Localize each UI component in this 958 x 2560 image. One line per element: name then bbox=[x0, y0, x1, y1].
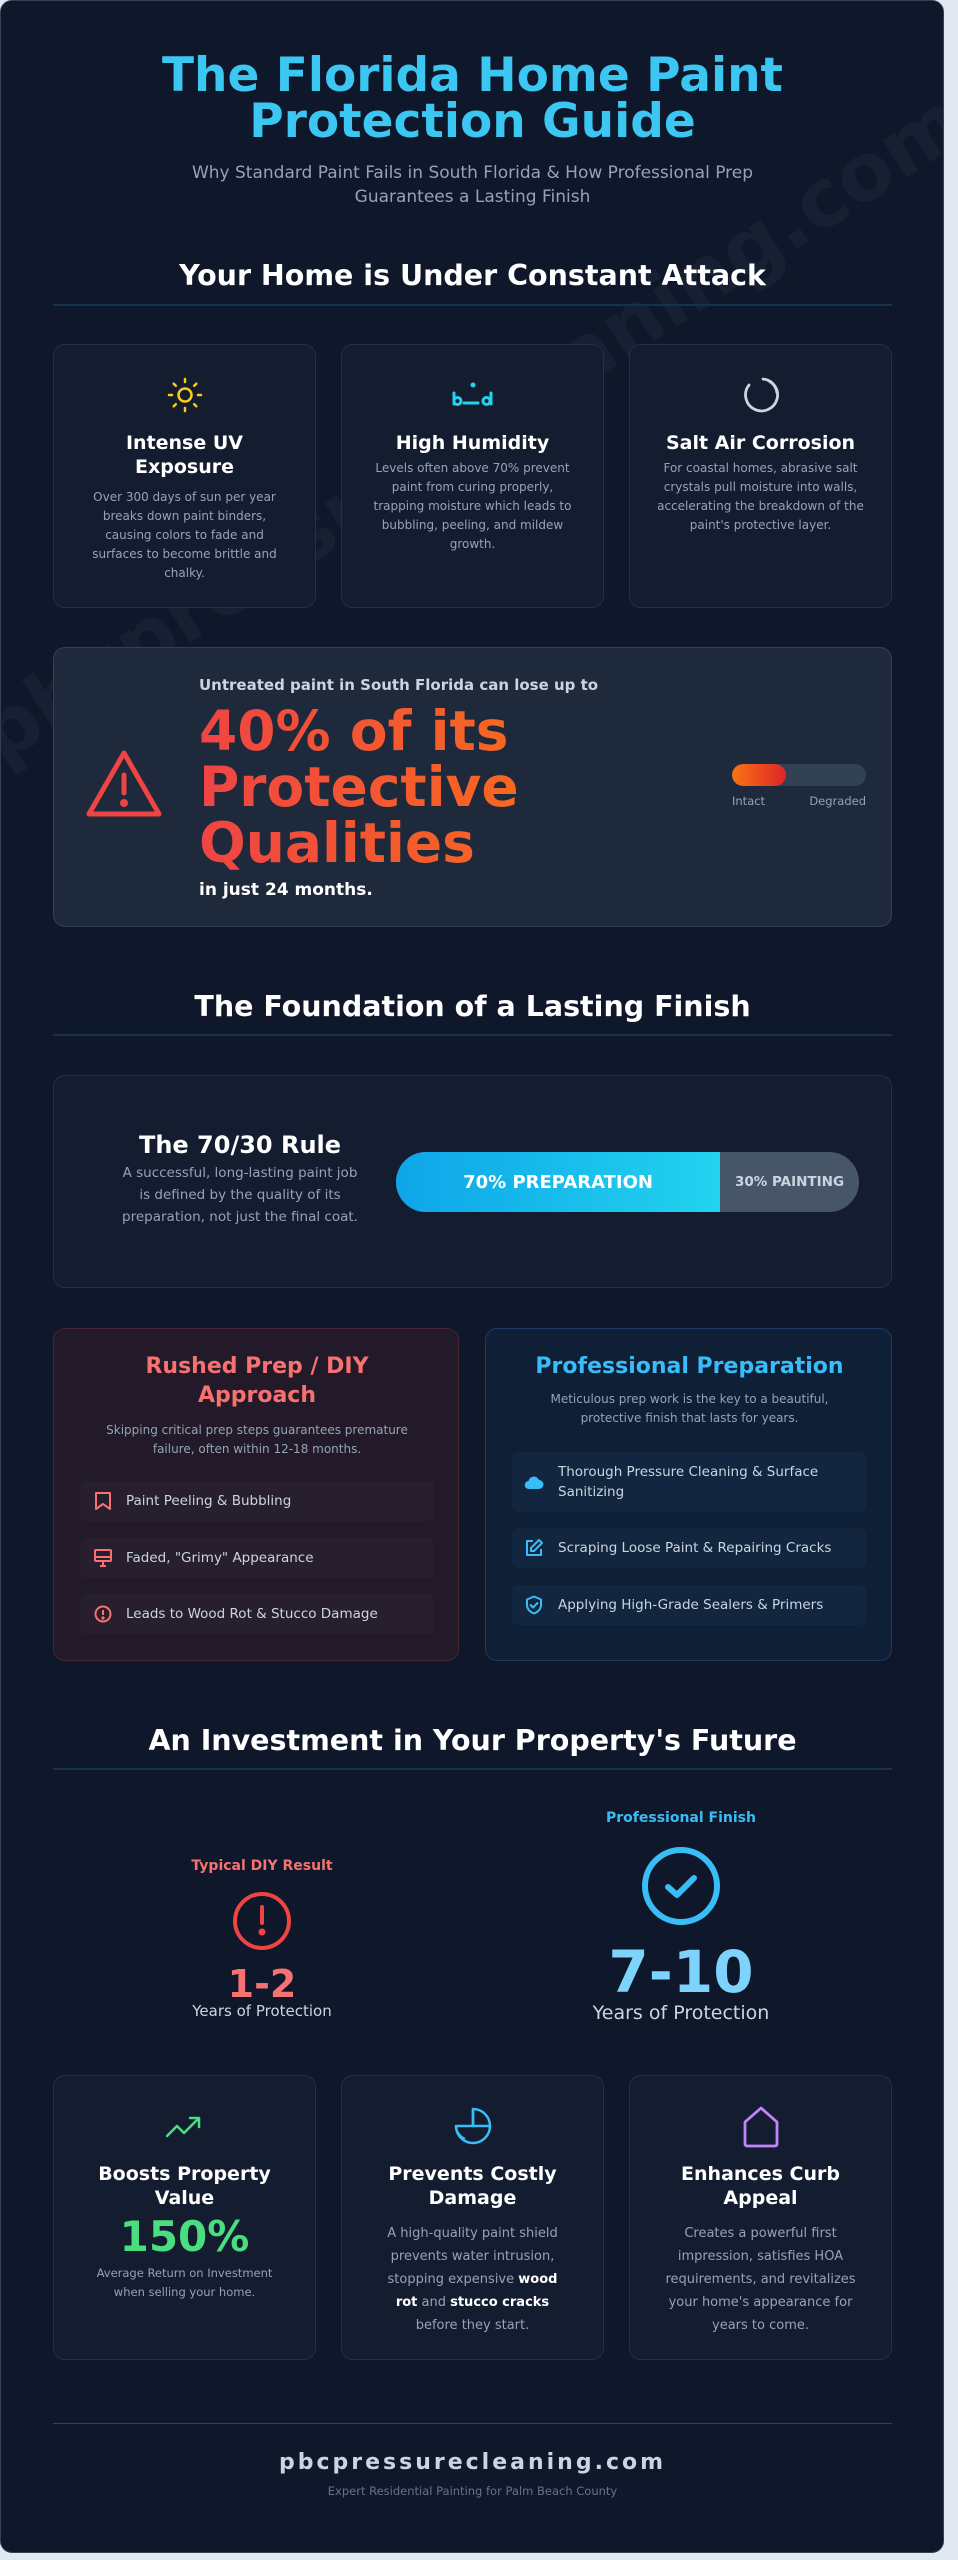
card: costly damage: Damage bbox=[429, 2187, 516, 2209]
icon: salt cycle bbox=[744, 378, 779, 412]
stat: professional finish: Professional Finish bbox=[606, 1810, 756, 1826]
item: sealers: Applying High-Grade Sealers & Primers bbox=[558, 1597, 823, 1613]
rule desc: A successful, long-lasting paint job is defined by the quality of its preparation, not just the final coat. bbox=[122, 1165, 358, 1225]
card: costly damage: A high-quality paint shield prevents water intrusion, stopping expensive wood rot and stucco cracks before they start. bbox=[387, 2226, 558, 2333]
title: Salt Air Corrosion bbox=[666, 432, 855, 454]
card: curb appeal: Creates a powerful first impression, satisfies HOA requirements, and revitalizes your home's appearance for years to come. bbox=[665, 2226, 856, 2333]
item: peeling bbox=[80, 1481, 434, 1521]
item: cleaning: Thorough Pressure Cleaning & Surface Sanitizing bbox=[558, 1464, 818, 1500]
degradation bar bbox=[732, 764, 866, 808]
card: humidity bbox=[341, 344, 604, 608]
card: salt bbox=[629, 344, 892, 608]
card: property value: Value bbox=[155, 2187, 214, 2209]
card: UV bbox=[53, 344, 316, 608]
split bar bbox=[396, 1152, 859, 1212]
card: property value bbox=[53, 2075, 316, 2360]
big stat: 40% of its Protective Qualities bbox=[199, 699, 519, 875]
split bar: 70% PREPARATION bbox=[463, 1172, 653, 1192]
card: property value: Boosts Property bbox=[98, 2163, 271, 2185]
item: peeling: Paint Peeling & Bubbling bbox=[126, 1493, 291, 1509]
icon: humidity bbox=[452, 382, 492, 406]
panel: 70/30 rule bbox=[53, 1075, 892, 1288]
item: cleaning bbox=[512, 1452, 866, 1512]
stat: DIY result: Years of Protection bbox=[192, 2002, 332, 2020]
split bar: 30% PAINTING bbox=[735, 1174, 844, 1190]
panel: professional prep bbox=[485, 1328, 892, 1661]
desc: Over 300 days of sun per year breaks down paint binders, causing colors to fade and surfaces to become brittle and chalky. bbox=[92, 490, 277, 580]
icon: pie bbox=[454, 2108, 492, 2144]
footer bbox=[279, 2450, 666, 2498]
card: curb appeal bbox=[629, 2075, 892, 2360]
icon: sun bbox=[168, 378, 202, 412]
item: sealers bbox=[512, 1585, 866, 1625]
desc: Levels often above 70% prevent paint from curing properly, trapping moisture which leads to bubbling, peeling, and mildew growth. bbox=[374, 461, 571, 551]
stat: professional finish bbox=[592, 1810, 769, 2024]
item: faded: Faded, "Grimy" Appearance bbox=[126, 1550, 314, 1566]
degradation bar: Degraded bbox=[809, 794, 866, 808]
degradation bar: Intact bbox=[732, 794, 765, 808]
title: Approach bbox=[198, 1383, 316, 1408]
title: Professional Preparation bbox=[535, 1354, 844, 1379]
title: Exposure bbox=[135, 456, 234, 478]
icon: alert circle bbox=[233, 1892, 291, 1950]
icon: check circle bbox=[642, 1847, 720, 1925]
title: High Humidity bbox=[396, 432, 549, 454]
icon: trend up bbox=[166, 2116, 200, 2138]
card: curb appeal: Appeal bbox=[723, 2187, 798, 2209]
heading: under attack: Your Home is Under Constant Attack bbox=[179, 259, 766, 292]
stat: DIY result: 1-2 bbox=[228, 1962, 296, 2006]
item: rot bbox=[80, 1594, 434, 1634]
icon: house bbox=[744, 2106, 778, 2148]
lead text: Untreated paint in South Florida can lose up to bbox=[199, 676, 598, 694]
title: Intense UV bbox=[126, 432, 243, 454]
title bbox=[162, 48, 783, 149]
item: scraping: Scraping Loose Paint & Repairing Cracks bbox=[558, 1540, 831, 1556]
title bbox=[145, 1354, 369, 1408]
stat 150%: 150% bbox=[120, 2212, 249, 2261]
stat: DIY result: Typical DIY Result bbox=[191, 1858, 333, 1874]
item: faded bbox=[80, 1538, 434, 1578]
item: rot: Leads to Wood Rot & Stucco Damage bbox=[126, 1606, 378, 1622]
panel: 40% stat bbox=[53, 647, 892, 927]
subtitle: Why Standard Paint Fails in South Florida & How Professional Prep Guarantees a Lasting Finish bbox=[192, 163, 753, 207]
desc: For coastal homes, abrasive salt crystals pull moisture into walls, accelerating the breakdown of the paint's protective layer. bbox=[657, 461, 864, 532]
title bbox=[126, 432, 243, 478]
heading: foundation: The Foundation of a Lasting Finish bbox=[194, 990, 751, 1023]
card: costly damage bbox=[341, 2075, 604, 2360]
panel: rushed prep bbox=[53, 1328, 459, 1661]
footer: pbcpressurecleaning.com bbox=[279, 2450, 666, 2475]
title: Protection Guide bbox=[249, 94, 696, 149]
icon: warning bbox=[86, 750, 162, 816]
title: Rushed Prep / DIY bbox=[145, 1354, 369, 1379]
card: property value: Average Return on Investment when selling your home. bbox=[97, 2266, 272, 2299]
card: curb appeal: Enhances Curb bbox=[681, 2163, 840, 2185]
desc: Skipping critical prep steps guarantees premature failure, often within 12-18 months. bbox=[106, 1423, 408, 1456]
stat: professional finish: Years of Protection bbox=[593, 2002, 769, 2024]
rule title: The 70/30 Rule bbox=[139, 1131, 341, 1159]
tail text: in just 24 months. bbox=[199, 880, 373, 900]
desc: Meticulous prep work is the key to a beautiful, protective finish that lasts for years. bbox=[550, 1392, 828, 1425]
title: The Florida Home Paint bbox=[162, 48, 783, 103]
item: scraping bbox=[512, 1528, 866, 1568]
card: costly damage: Prevents Costly bbox=[388, 2163, 557, 2185]
footer: Expert Residential Painting for Palm Beach County bbox=[328, 2484, 617, 2498]
stat: professional finish: 7-10 bbox=[608, 1938, 754, 2006]
stat: DIY result bbox=[191, 1858, 333, 2020]
heading: investment: An Investment in Your Property's Future bbox=[148, 1724, 797, 1757]
